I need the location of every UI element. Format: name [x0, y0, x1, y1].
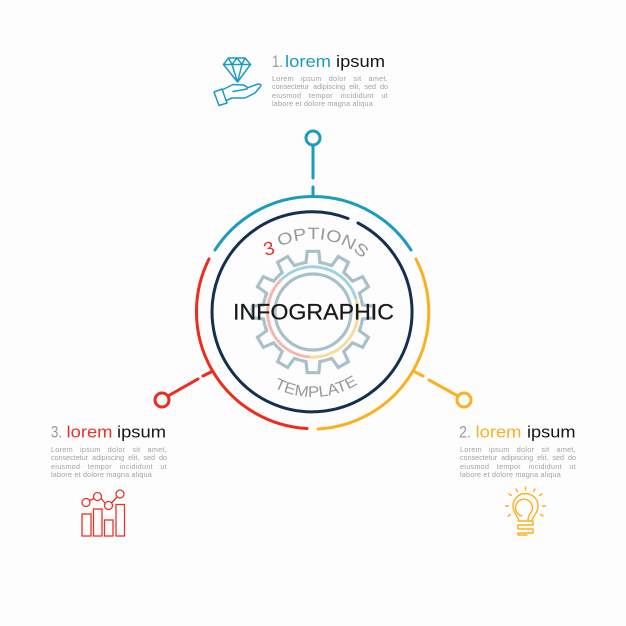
heading 2: lorem [476, 422, 522, 442]
connector: yellow [415, 372, 471, 407]
curved text: options: OPTIONS [278, 228, 368, 256]
heading 1: lorem [285, 52, 331, 71]
outer arc: blue [215, 196, 411, 250]
icon: bar chart [82, 490, 124, 536]
heading 3: 3. [51, 422, 62, 442]
body text 2: eiusmod tempor incididunt ut [460, 462, 576, 471]
body text 2: consectetur adipiscing elit, sed do [460, 453, 576, 462]
body text 3 [51, 444, 167, 479]
gear emblem [252, 251, 374, 373]
body text 1: Lorem ipsum dolor sit amet, [272, 74, 388, 82]
heading 3: lorem [66, 422, 112, 442]
body text 2: labore et dolore magna aliqua [460, 470, 561, 479]
icon: diamond in hand [214, 58, 261, 106]
body text 2 [460, 444, 576, 479]
heading 3 [51, 422, 166, 442]
connector: red [155, 372, 211, 407]
inner navy ring [212, 212, 412, 412]
outer arc: yellow [318, 259, 429, 429]
connector: blue [306, 131, 320, 195]
outer arc: red [196, 259, 307, 428]
body text 3: Lorem ipsum dolor sit amet, [51, 444, 167, 454]
body text 2: Lorem ipsum dolor sit amet, [460, 444, 576, 454]
body text 3: eiusmod tempor incididunt ut [51, 462, 167, 471]
body text 3: consectetur adipiscing elit, sed do [51, 453, 167, 462]
curved text: template: TEMPLATE [278, 375, 358, 397]
heading 1: ipsum [336, 52, 385, 71]
icon: light bulb [506, 487, 546, 535]
heading 1: 1. [272, 52, 283, 71]
heading 2: 2. [459, 422, 471, 442]
heading 2: ipsum [527, 422, 576, 442]
centre number 3: 3 [261, 238, 277, 261]
body text 1: eiusmod tempor incididunt ut [272, 91, 388, 100]
body text 1: consectetur adipiscing elit, sed do [272, 82, 388, 91]
heading 2 [459, 422, 576, 442]
body text 1: labore et dolore magna aliqua [272, 99, 373, 108]
body text 3: labore et dolore magna aliqua [51, 470, 152, 479]
heading 1 [272, 52, 385, 71]
centre title: INFOGRAPHIC [233, 300, 394, 324]
body text 1 [272, 74, 388, 108]
heading 3: ipsum [117, 422, 166, 442]
